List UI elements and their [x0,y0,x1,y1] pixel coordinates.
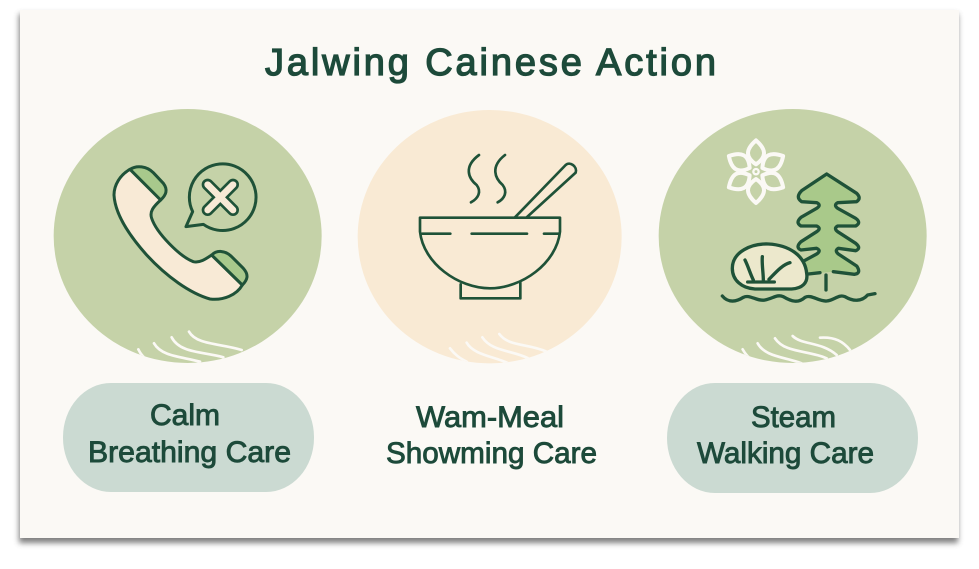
label text: Showming Care [386,437,597,470]
icon: steaming bowl with spoon [420,155,576,298]
panel: warm meal care [358,110,622,470]
icon: phone handset [114,167,247,299]
decorative swoosh lines [450,334,547,363]
label text: Breathing Care [88,436,291,469]
icon: speech bubble with cross [186,164,256,231]
icon: white flower [725,140,787,203]
panel: steam walking care [659,109,927,493]
panel: calm breathing care [54,109,322,492]
icon: rock with grass [732,244,807,289]
label pill [63,383,314,492]
label pill [667,383,918,493]
label text [697,401,874,470]
icon circle: phone [54,109,322,365]
label text: Calm [150,399,220,432]
icon: water wave [722,294,875,301]
title: Jalwing Cainese Action [265,42,716,84]
icon: pine tree [798,174,859,290]
label text [88,399,291,469]
label text: Wam-Meal [416,401,564,434]
decorative swoosh lines [138,332,242,365]
label text: Steam [751,401,836,434]
icon circle: bowl [358,110,622,363]
icon circle: nature [659,109,927,365]
label text: Walking Care [697,437,874,470]
label text [386,401,597,470]
decorative swoosh lines [743,336,850,365]
